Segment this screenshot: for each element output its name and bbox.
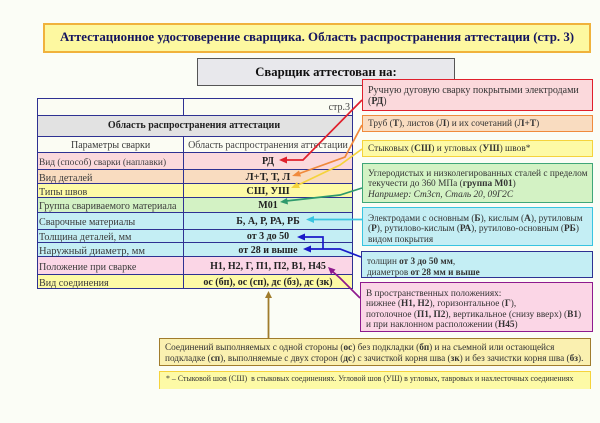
callout: thickness and diameter: диаметров от 28 мм и выше xyxy=(367,267,480,277)
callout: manual arc welding xyxy=(362,79,593,111)
callout: thickness and diameter xyxy=(361,251,593,278)
callout: welding positions: нижнее (Н1, Н2), горизонтальное (Г), xyxy=(366,299,516,309)
callout: manual arc welding: Ручную дуговую сварку покрытыми электродами xyxy=(368,84,579,96)
table row: part type: Л+Т, Т, Л xyxy=(246,172,290,182)
table row: welding position: Н1, Н2, Г, П1, П2, В1, Н45 xyxy=(210,260,326,272)
callout: electrodes: видом покрытия xyxy=(368,235,433,245)
callout: welding positions xyxy=(360,282,593,332)
arrow: blue xyxy=(297,234,361,257)
callout: joint types: подкладке (сп), выполняемые с двух сторон (дс) с зачисткой корня шва (зк) и без зачистки корня шва (бз). xyxy=(165,354,583,364)
table row: joint type: Вид соединения xyxy=(39,278,109,288)
callout: manual arc welding: (РД) xyxy=(368,96,387,107)
arrow: brown xyxy=(265,291,272,338)
table row: weld types: СШ, УШ xyxy=(246,186,290,196)
callout: joint types xyxy=(159,338,591,366)
table row: welding method: Вид (способ) сварки (наплавки) xyxy=(39,158,166,168)
footnote: * – Стыковой шов (СШ) в стыковых соединениях. Угловой шов (УШ) в угловых, тавровых и нахлесточных соединениях xyxy=(166,374,573,383)
table row: part type xyxy=(37,170,353,184)
table row: joint type xyxy=(37,275,353,289)
arrow: yellow xyxy=(291,149,362,188)
subtitle: welder certified for: Сварщик аттестован на: xyxy=(255,65,397,79)
arrow: orange xyxy=(292,125,362,176)
table row: welding method: РД xyxy=(262,156,274,167)
table row: page number: стр.3 xyxy=(329,102,350,113)
arrow: green xyxy=(280,188,362,204)
table row: column headers: Параметры сварки xyxy=(71,140,150,150)
footnote xyxy=(159,371,591,389)
table row: part thickness: от 3 до 50 xyxy=(247,231,289,242)
callout: butt and fillet welds: Стыковых (СШ) и угловых (УШ) швов* xyxy=(368,144,530,154)
table row: column headers xyxy=(37,137,353,153)
subtitle: welder certified for xyxy=(197,58,455,86)
arrow: cyan xyxy=(306,216,362,223)
arrow: purple xyxy=(328,267,360,298)
table row: column headers: Область распространения аттестации xyxy=(188,140,348,150)
table row: welding consumables: Б, А, Р, РА, РБ xyxy=(236,216,300,227)
callout: electrodes: (Р), рутилово-кислым (РА), рутилово-основным (РБ) xyxy=(368,224,579,234)
callout: electrodes xyxy=(362,207,593,246)
table: scope of certification xyxy=(37,98,353,289)
table row: weld types: Типы швов xyxy=(39,186,87,198)
callout: pipes and sheets: Труб (Т), листов (Л) и их сочетаний (Л+Т) xyxy=(368,119,539,129)
callout: material group M01: текучести до 360 МПа (группа М01) xyxy=(368,179,516,189)
callout: material group M01: Углеродистых и низколегированных сталей с пределом xyxy=(368,168,588,178)
callout: electrodes: Электродами с основным (Б), кислым (А), рутиловым xyxy=(368,214,583,224)
callout: material group M01: Например: Ст3сп, Сталь 20, 09Г2С xyxy=(368,190,513,200)
table row: welding position: Положение при сварке xyxy=(39,262,136,272)
table row: material group: Группа свариваемого материала xyxy=(39,201,176,212)
callout: material group M01 xyxy=(362,163,593,203)
callout: pipes and sheets xyxy=(362,115,593,132)
table row: part thickness xyxy=(37,230,353,243)
callout: welding positions: и при наклонном расположении (Н45) xyxy=(366,320,518,330)
table row: material group xyxy=(37,198,353,213)
table row: welding consumables: Сварочные материалы xyxy=(39,217,135,228)
callout: welding positions: потолочное (П1, П2), вертикальное (снизу вверх) (В1) xyxy=(366,310,581,320)
table row: outer diameter xyxy=(37,243,353,257)
table row: material group: М01 xyxy=(258,200,278,211)
callout: joint types: Соединений выполняемых с одной стороны (ос) без подкладки (бп) и на съемной или остающейся xyxy=(165,343,554,353)
table row: section heading: Область распространения аттестации xyxy=(108,120,280,131)
table row: part type: Вид деталей xyxy=(39,172,92,184)
callout: welding positions: В пространственных положениях: xyxy=(366,288,501,298)
table row: outer diameter: от 28 и выше xyxy=(238,244,298,256)
table row: part thickness: Толщина деталей, мм xyxy=(39,232,131,243)
table row: welding consumables xyxy=(37,213,353,230)
table row: outer diameter: Наружный диаметр, мм xyxy=(39,246,145,256)
title: Аттестационное удостоверение сварщика. Область распространения аттестации (стр. 3) xyxy=(60,30,574,44)
table row: welding position xyxy=(37,257,353,275)
title xyxy=(43,23,591,53)
table row: welding method xyxy=(37,153,353,170)
table row: joint type: ос (бп), ос (сп), дс (бз), дс (зк) xyxy=(203,276,333,288)
callout: thickness and diameter: толщин от 3 до 50 мм, xyxy=(367,256,455,266)
table row: weld types xyxy=(37,184,353,198)
callout: butt and fillet welds xyxy=(362,140,593,157)
table row: section heading xyxy=(37,116,353,137)
arrow: red xyxy=(279,100,362,164)
table row: page number xyxy=(37,98,353,116)
